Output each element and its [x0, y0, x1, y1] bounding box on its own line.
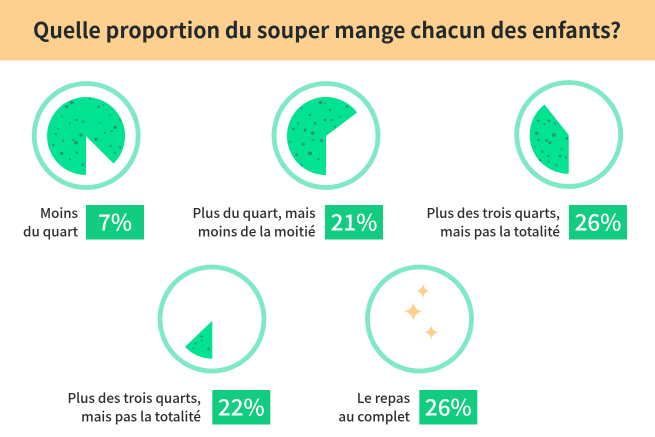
title: Quelle proportion du souper mange chacun des enfants? — [33, 14, 621, 45]
icon: plate with most of the meal left — [34, 84, 138, 188]
value badge: 26% — [575, 206, 621, 238]
label: Le repas — [357, 387, 410, 407]
label: Plus des trois quarts, — [67, 387, 201, 407]
value badge — [86, 205, 144, 240]
panel: moins du quart — [23, 84, 144, 240]
panel: plus des trois quarts 26% — [426, 82, 627, 240]
icon: plate with about two thirds left — [274, 84, 378, 188]
panel: le repas au complet — [338, 267, 477, 426]
panel: plus du quart — [192, 84, 383, 240]
label: au complet — [338, 406, 411, 426]
icon: empty plate with sparkles — [368, 267, 472, 371]
value badge: 21% — [331, 206, 377, 238]
label: du quart — [23, 220, 79, 240]
value badge: 7% — [98, 206, 132, 238]
label: mais pas la totalité — [440, 220, 560, 240]
label: mais pas la totalité — [81, 406, 201, 426]
label: Plus du quart, mais — [192, 202, 316, 222]
label: Moins — [40, 202, 78, 222]
icon: plate with a small slice left — [160, 267, 264, 371]
header banner — [0, 0, 655, 60]
panel: plus des trois quarts 22% — [67, 267, 270, 426]
value badge: 26% — [425, 390, 472, 422]
icon: plate with a wedge left — [517, 82, 621, 186]
value badge: 22% — [218, 390, 265, 422]
label: moins de la moitié — [198, 220, 316, 240]
label: Plus des trois quarts, — [426, 202, 560, 222]
